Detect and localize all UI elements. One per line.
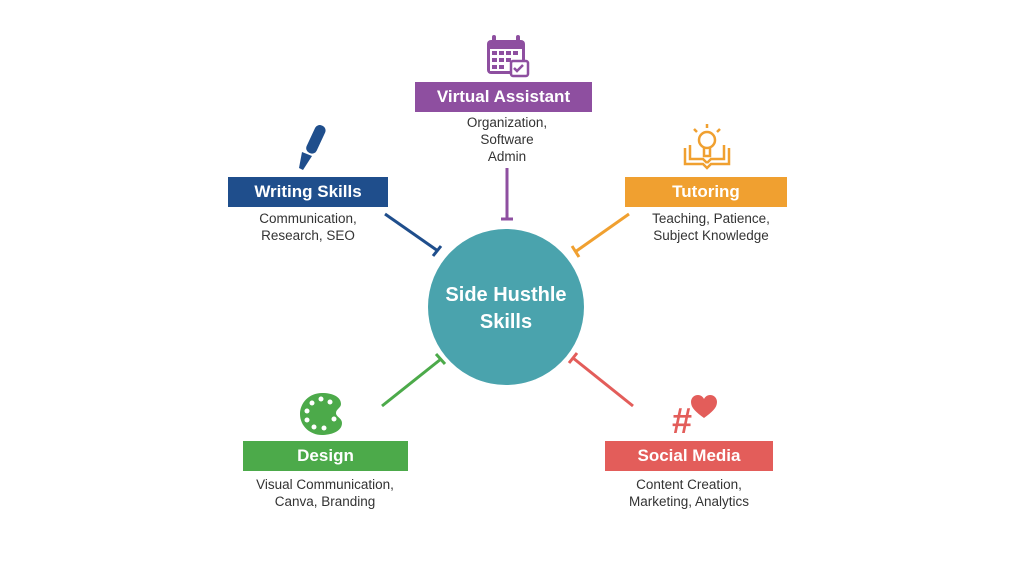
central circle [428,229,584,385]
text: social desc: Marketing, Analytics [629,494,749,509]
icon: palette [300,393,342,435]
text: virtual assistant desc: Admin [488,149,526,164]
box: tutoring [625,177,787,207]
box: design [243,441,408,471]
text: design desc: Visual Communication, [256,477,394,492]
icon: lightbulb book [685,124,729,168]
text: writing desc: Communication, [259,211,357,226]
box: writing skills: Writing Skills [254,182,362,201]
text: virtual assistant desc: Software [480,132,534,147]
text: virtual assistant desc: Organization, [467,115,547,130]
connector: social media [569,353,633,406]
icon: hashtag heart [672,395,717,441]
text: tutoring desc [652,211,770,243]
text: tutoring desc: Subject Knowledge [653,228,769,243]
connector: writing [385,214,441,256]
text: writing desc [259,211,357,243]
box: design: Design [297,446,354,465]
text: tutoring desc: Teaching, Patience, [652,211,770,226]
icon: calendar [487,35,528,76]
text: social desc: Content Creation, [636,477,742,492]
central circle: Skills [480,311,532,333]
icon: hashtag heart: # [672,400,692,441]
box: social media: Social Media [638,446,740,465]
text: social desc [629,477,749,509]
box: tutoring: Tutoring [672,182,740,201]
text: writing desc: Research, SEO [261,228,355,243]
box: virtual assistant [415,82,592,112]
icon: fountain pen [299,123,327,170]
connector: design [382,354,445,406]
connector: tutoring [572,214,629,257]
box: virtual assistant: Virtual Assistant [437,87,570,106]
text: design desc [256,477,394,509]
text: virtual assistant desc [467,115,547,164]
text: design desc: Canva, Branding [275,494,375,509]
box: writing skills [228,177,388,207]
connector: virtual assistant [501,168,513,219]
central circle: Side Husthle [445,284,567,306]
box: social media [605,441,773,471]
